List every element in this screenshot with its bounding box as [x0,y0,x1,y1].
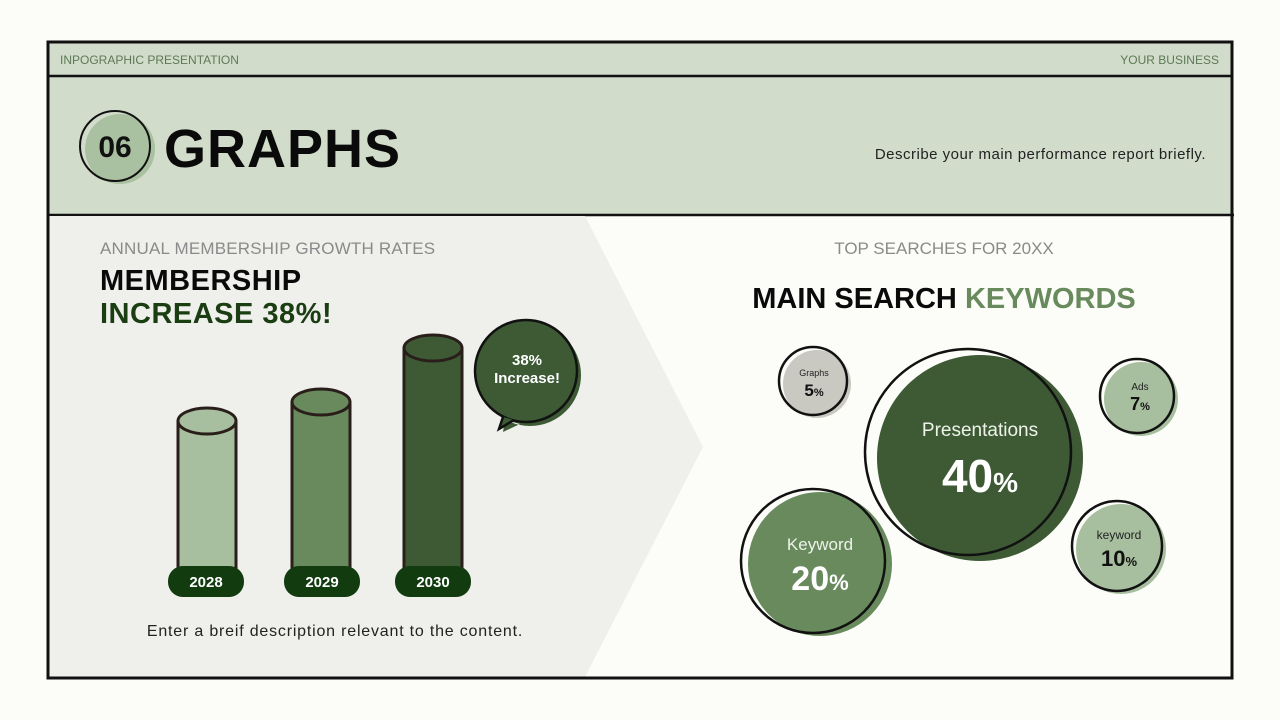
bubble: keyword 20: 20% [791,560,849,598]
callout: 38% increase: 38% [512,352,542,369]
bubble: ads: Ads [1131,382,1149,393]
panel: keywords [741,239,1178,636]
bar chart [178,335,462,585]
heading: INCREASE 38%! [100,298,332,330]
bubble: keyword 10: keyword [1097,528,1141,542]
callout: 38% increase: Increase! [494,370,560,387]
header strip: YOUR BUSINESS [1120,53,1219,67]
bubble: graphs: 5% [804,381,824,400]
header strip [48,42,1232,76]
description: Enter a breif description relevant to the content. [147,623,523,640]
panel: left arrow background [49,216,703,677]
heading: MAIN SEARCH KEYWORDS [752,283,1136,315]
bubble: keyword 10: 10% [1101,546,1137,571]
bubble: presentations: 40% [942,450,1018,502]
heading: MEMBERSHIP [100,265,302,297]
bubble: keyword 20 [741,489,892,636]
heading [100,239,435,330]
icon: number badge [80,111,155,184]
bubble: keyword 20: Keyword [787,535,853,554]
icon: number badge: 06 [98,131,132,164]
bubble: ads: 7% [1130,394,1150,414]
subtitle: Describe your main performance report briefly. [875,146,1206,163]
bubble: keyword 10 [1072,501,1166,594]
year labels: 2029 [305,574,339,591]
title band [48,76,1232,215]
callout: 38% increase [475,320,581,432]
bubble: graphs [779,347,851,418]
panel: membership [100,239,581,640]
heading [752,239,1136,315]
header strip: INPOGRAPHIC PRESENTATION [60,53,239,67]
bubble: presentations [865,349,1083,561]
bubble: ads [1100,359,1178,436]
year labels [168,566,471,597]
year labels: 2028 [189,574,223,591]
year labels: 2030 [416,574,450,591]
bubble: graphs: Graphs [799,368,829,378]
title: GRAPHS [164,119,401,179]
heading: TOP SEARCHES FOR 20XX [834,239,1054,258]
bubble: presentations: Presentations [922,420,1038,441]
heading: ANNUAL MEMBERSHIP GROWTH RATES [100,239,435,258]
